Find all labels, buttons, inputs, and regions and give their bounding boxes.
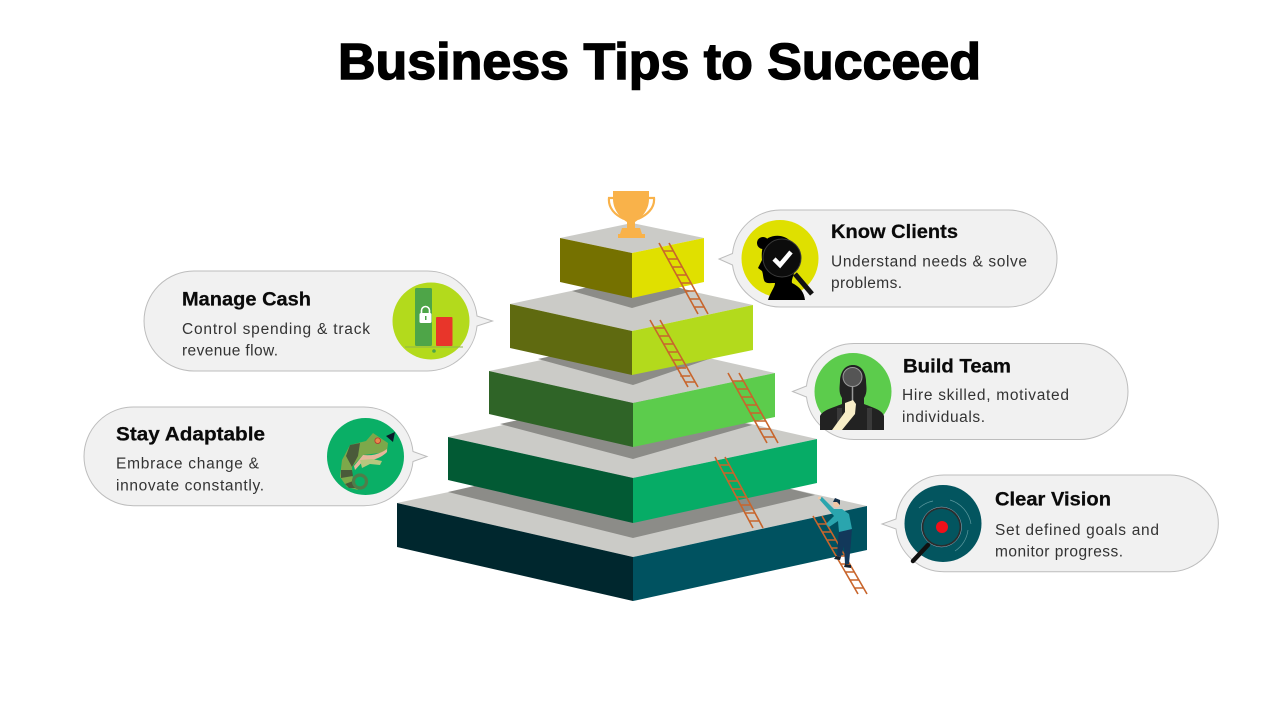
- text block: Embrace change &: [116, 455, 260, 472]
- text block: revenue flow.: [182, 342, 278, 360]
- text block: [831, 254, 1027, 292]
- icon: cash bars: [392, 282, 470, 360]
- text block: Set defined goals and: [995, 522, 1159, 539]
- text block: Control spending & track: [182, 321, 370, 338]
- icon: climbing person: [818, 496, 852, 568]
- tier 5: base: [397, 450, 867, 601]
- heading: Build Team: [903, 356, 1011, 378]
- text block: [902, 387, 1069, 426]
- panel: stay adaptable: [84, 407, 427, 506]
- heading: Stay Adaptable: [116, 424, 265, 446]
- heading: Know Clients: [831, 221, 958, 243]
- ladder 2: [650, 320, 698, 387]
- text block: Understand needs & solve: [831, 254, 1027, 270]
- ladder 5: [813, 516, 867, 594]
- panel: clear vision: [882, 475, 1218, 572]
- text block: [182, 321, 370, 360]
- tier 3: [489, 338, 775, 447]
- heading: Manage Cash: [182, 288, 311, 310]
- icon: head with magnifier: [742, 220, 818, 300]
- text block: Hire skilled, motivated: [902, 387, 1069, 404]
- text block: innovate constantly.: [116, 478, 264, 494]
- icon: trophy: [609, 191, 654, 238]
- tier 1: top: [560, 223, 704, 298]
- text block: problems.: [831, 275, 902, 292]
- heading: Clear Vision: [995, 488, 1111, 510]
- ladder 3: [728, 373, 778, 443]
- pyramid: [397, 223, 867, 601]
- panel: manage cash: [144, 271, 492, 371]
- ladder 4: [715, 457, 763, 528]
- ladder 1: [659, 243, 708, 314]
- text block: individuals.: [902, 409, 985, 426]
- tier 4: [448, 395, 817, 523]
- text block: [116, 455, 264, 494]
- icon: target under magnifier: [904, 485, 982, 562]
- text block: [995, 522, 1159, 560]
- icon: chameleon: [327, 418, 404, 495]
- icon: person with magnifier: [814, 353, 892, 430]
- panel: know clients: [719, 210, 1057, 307]
- text block: monitor progress.: [995, 544, 1123, 560]
- panel: build team: [792, 344, 1128, 440]
- tier 2: [510, 276, 753, 375]
- title: Business Tips to Succeed: [338, 33, 981, 90]
